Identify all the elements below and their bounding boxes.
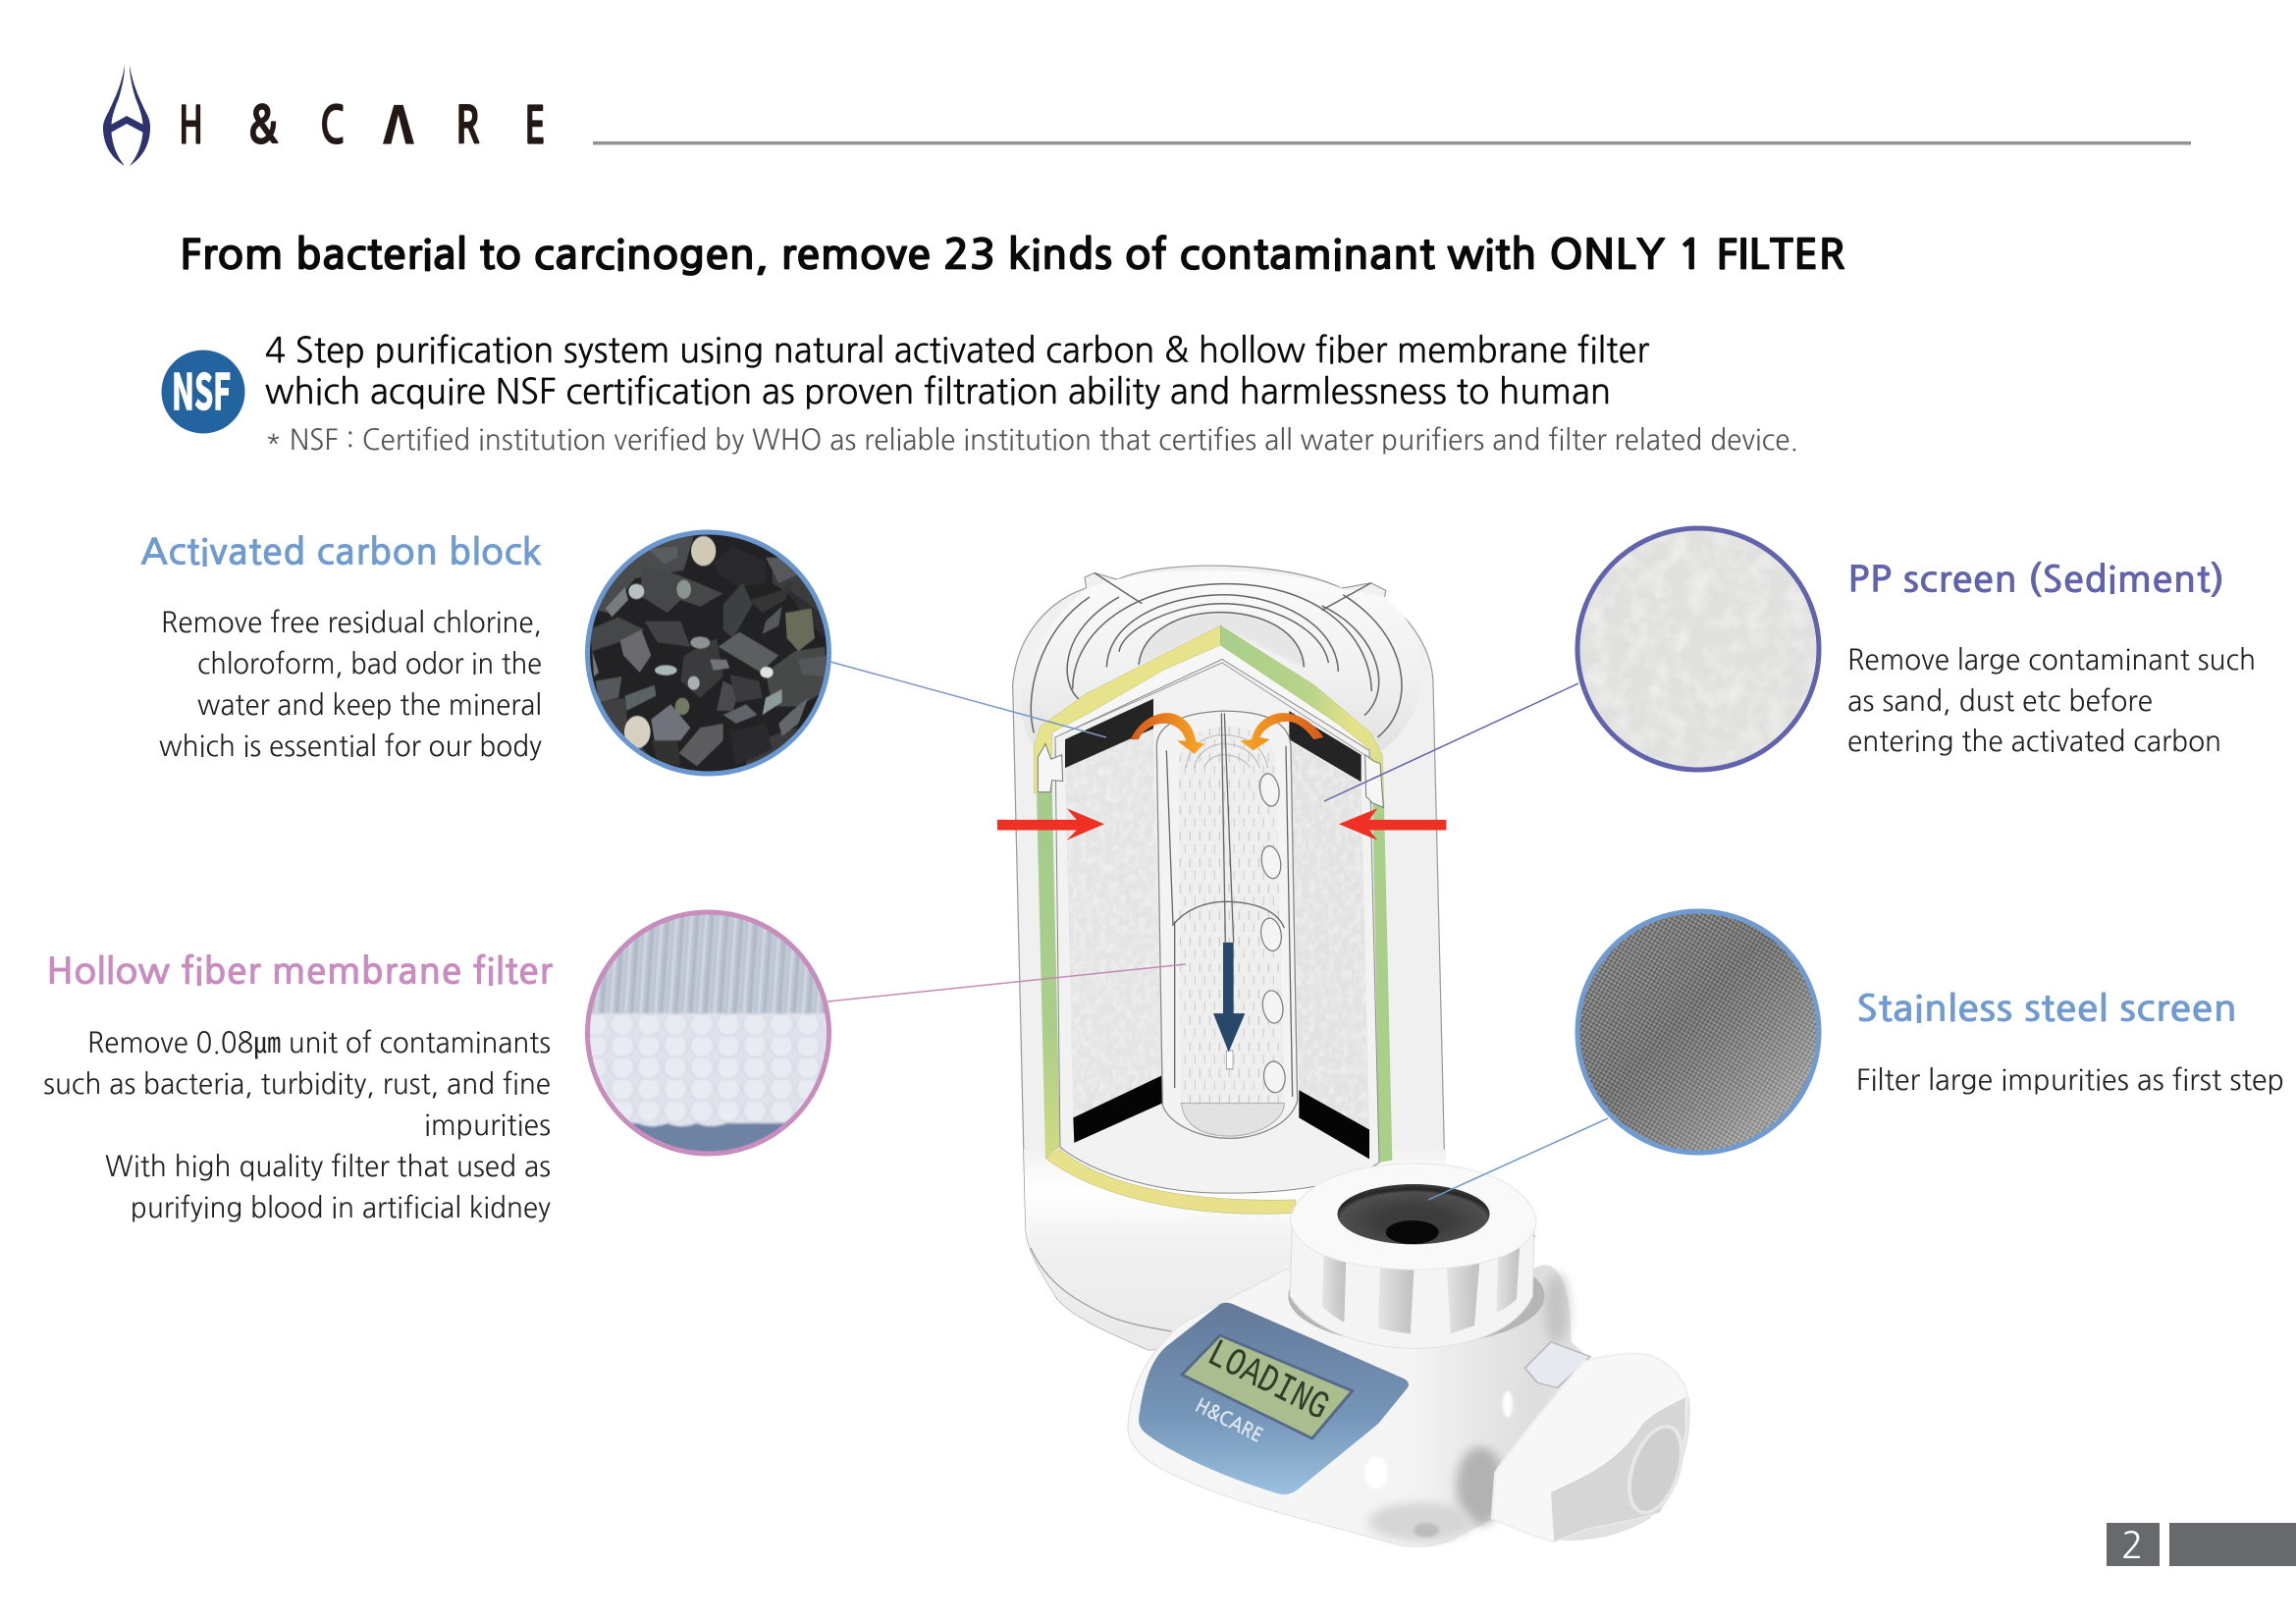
logo: H&CARE [103,65,546,166]
panel: hollow fiber membrane text [43,953,554,1222]
band under wall [1052,645,1371,755]
page number [2107,1523,2160,1566]
panel: hollow fiber membrane text: purifying blood in artificial kidney [131,1194,552,1222]
body shading [1365,1273,1569,1542]
cartridge body silhouette [1013,566,1446,1350]
panel: stainless steel screen text: Stainless steel screen [1856,991,2237,1027]
photo: PP screen [1577,528,1819,770]
panel: PP screen text: as sand, dust etc before [1847,687,2153,716]
icon: NSF badge: NSF [172,353,231,424]
panel: PP screen text: Remove large contaminant such [1847,646,2256,675]
page number: 2 [2121,1528,2143,1564]
top cap [1021,570,1422,750]
title: From bacterial to carcinogen, remove 23 kinds of contaminant with ONLY 1 FILTER [180,235,1845,276]
arrow: navy down flow [1213,943,1245,1069]
LCD text: LOADING [1200,1332,1335,1432]
wordmark letters: E [524,100,546,151]
panel: hollow fiber membrane text: Remove 0.08㎛ unit of contaminants [87,1029,551,1059]
panel: hollow fiber membrane text: Hollow fiber membrane filter [46,953,554,990]
icon: water drop logo mark [103,65,150,166]
header rule [593,141,2191,145]
carbon band top right [1289,711,1362,782]
arrow: orange left [1131,713,1204,754]
carbon band top left [1065,699,1153,768]
central hollow fiber cylinder [1156,711,1298,1138]
left PP screen panel [1065,729,1161,1118]
wordmark letters [179,100,546,151]
panel: activated carbon block text [140,534,543,761]
arrow: orange right [1240,713,1323,750]
icon: NSF badge [161,350,245,434]
cartridge base [1024,1150,1446,1350]
arrow: red right inflow [1339,808,1446,840]
panel: hollow fiber membrane text: With high quality filter that used as [105,1153,551,1181]
panel: PP screen text: entering the activated carbon [1847,728,2221,756]
intro text block [265,333,1798,455]
panel: activated carbon block text: chloroform, bad odor in the [197,650,542,678]
intro text block: * NSF : Certified institution verified by WHO as reliable institution that certifies all water purifiers and filter related device. [265,426,1798,455]
right PP screen panel [1291,741,1369,1132]
wall clip right [1365,755,1383,807]
panel: activated carbon block text: which is essential for our body [159,732,543,761]
blue display panel [1139,1303,1409,1494]
interior [1055,659,1379,1193]
wordmark letters: H [179,100,203,151]
panel: stainless steel screen text [1856,991,2284,1095]
carbon band bottom left [1073,1076,1162,1143]
intro text block: which acquire NSF certification as proven filtration ability and harmlessness to human [265,374,1611,409]
wordmark letters: R [455,100,480,151]
panel: stainless steel screen text: Filter large impurities as first step [1856,1066,2284,1095]
wordmark letters: C [320,100,345,151]
intro text block: 4 Step purification system using natural activated carbon & hollow fiber membrane filter [265,333,1649,368]
footer bar [2169,1523,2296,1566]
panel: activated carbon block text: water and keep the mineral [197,691,542,720]
device brand label: H&CARE [1193,1395,1266,1445]
panel: PP screen text: PP screen (Sediment) [1847,561,2224,598]
arrow: red left inflow [997,808,1104,840]
photo: stainless steel mesh [1571,903,1826,1159]
wall clip left [1038,744,1063,792]
wordmark letters: Λ [383,100,414,151]
photo: activated carbon [585,530,831,776]
panel: activated carbon block text: Remove free residual chlorine, [161,609,542,637]
wordmark letters: & [248,100,278,151]
panel: hollow fiber membrane text: such as bacteria, turbidity, rust, and fine [43,1070,551,1099]
LCD screen [1182,1335,1353,1438]
panel: activated carbon block text: Activated carbon block [140,534,543,570]
green and yellow housing wall [1034,625,1392,1214]
leader lines [828,662,1608,1200]
faucet filter device [1128,1164,1691,1546]
panel: PP screen text [1847,561,2256,756]
carbon band bottom right [1299,1090,1369,1159]
photo: hollow fibers [579,903,839,1159]
panel: hollow fiber membrane text: impurities [424,1111,551,1140]
filter cartridge cutaway illustration [997,566,1446,1350]
device body [1128,1266,1689,1546]
collar nut [1288,1164,1544,1348]
lever handle [1492,1354,1691,1542]
side sticker [1524,1342,1590,1387]
base contour line [1031,1248,1171,1331]
